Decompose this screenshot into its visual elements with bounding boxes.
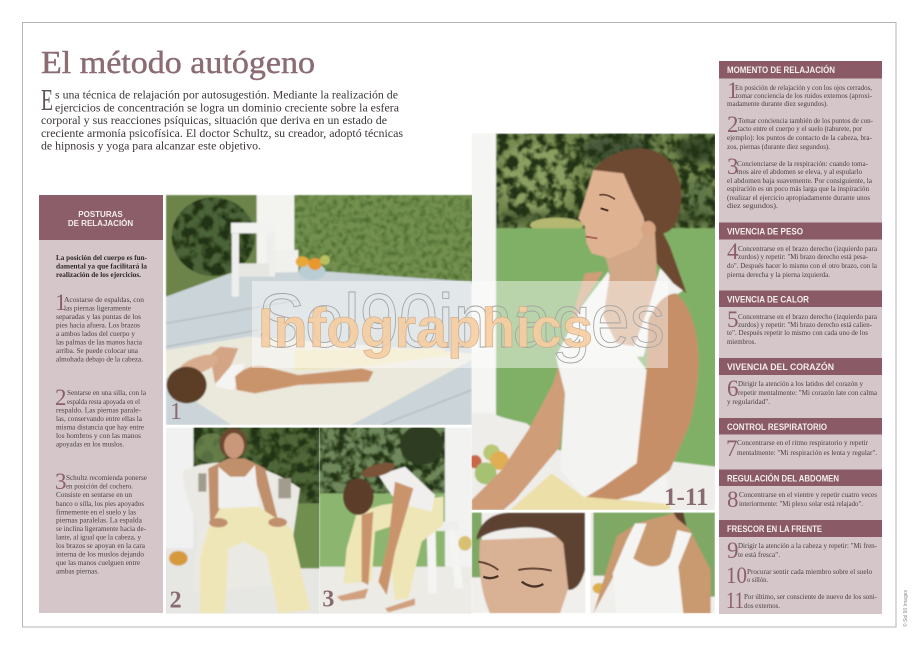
number 3: 3 (322, 587, 334, 613)
panel: autogenous exercises (719, 61, 882, 614)
watermark: Sol90images (258, 279, 665, 364)
section: control respiratorio: Concentrarse en el ritmo respiratorio y repetir (737, 438, 869, 447)
section: control respiratorio: mentalmente: "Mi respiración es lenta y regular". (737, 448, 877, 457)
section: frescor en la frente: Procurar sentir cada miembro sobre el suelo (747, 567, 872, 576)
posture 1 text: Acostarse de espaldas, con (64, 295, 144, 304)
section: vivencia de peso (719, 222, 882, 279)
photo 1: lying posture (166, 195, 473, 425)
section: frescor en la frente: te está fresca". (738, 550, 780, 559)
panel heading (68, 210, 133, 228)
posture 1 text: almohada debajo de la cabeza. (56, 354, 143, 364)
section: vivencia de calor: miembros. (727, 337, 756, 346)
number 1: 1 (170, 399, 182, 425)
photo 2: seated in chair (165, 427, 322, 615)
posture 3 text: lante, al igual que la cabeza, y (56, 532, 141, 542)
section: momento de relajación (719, 61, 882, 210)
section: momento de relajación: diez segundos). (727, 201, 778, 210)
section: vivencia del corazón: 6 (727, 376, 738, 401)
posture 1 text: 1 (55, 290, 66, 315)
section: momento de relajación: tomar conciencia de los ruidos externos (aproxi- (736, 91, 873, 100)
posture 1 text: pies hacia afuera. Los brazos (56, 320, 140, 330)
section: vivencia de peso: 4 (727, 239, 739, 264)
section: frescor en la frente: 9 (727, 538, 738, 563)
section: vivencia de peso: zurdos) y repetir: "Mi brazo derecho está pesa- (738, 252, 868, 261)
panel intro: La posición del cuerpo es fun- (56, 253, 148, 262)
panel heading: POSTURAS (78, 210, 123, 219)
intro text block: s una técnica de relajación por autosugestión. Mediante la realización de (55, 88, 398, 102)
posture 3 text: ambas piernas. (56, 566, 99, 576)
posture 3 text: que las manos cuelguen entre (56, 558, 141, 567)
section: vivencia de peso: pierna derecha y la pierna izquierda. (727, 270, 830, 279)
section: momento de relajación: tacto entre el cuerpo y el suelo (taburete, por (738, 124, 862, 133)
posture 3 text: banco o silla, los pies apoyados (56, 499, 144, 508)
panel intro: damental ya que facilitará la (56, 262, 147, 270)
section: vivencia del corazón: repetir mentalmente: "Mi corazón late con calma (738, 388, 878, 397)
section: vivencia del corazón: VIVENCIA DEL CORAZÓN (727, 361, 834, 372)
posture 3 text: en posición del cochero. (66, 482, 133, 490)
section: regulación del abdomen: REGULACIÓN DEL ABDOMEN (727, 472, 839, 484)
section: frescor en la frente: Dirigir la atención a la cabeza y repetir: "Mi fren- (738, 541, 878, 550)
posture 3 text: 3 (55, 469, 66, 494)
intro text block: ejercicios de concentración se logra un dominio creciente sobre la esfera (55, 102, 399, 114)
section: regulación del abdomen: interiormente: "Mi plexo solar está relajado". (739, 499, 863, 508)
posture 1 text: a ambos lados del cuerpo y (56, 329, 135, 338)
section: vivencia del corazón: y regularidad". (727, 397, 770, 406)
photo: torso detail (590, 512, 715, 613)
panel heading: DE RELAJACIÓN (68, 219, 133, 228)
section: vivencia de calor: Concentrarse en el brazo derecho (izquierdo para (738, 312, 878, 321)
section: momento de relajación: el abdomen baja suavemente. Por consiguiente, la (727, 176, 873, 185)
section: momento de relajación: ejemplo): los puntos de contacto de la cabeza, bra- (727, 133, 873, 142)
section: momento de relajación: En posición de relajación y con los ojos cerrados, (735, 83, 872, 92)
section: momento de relajación: Concienciarse de la respiración: cuando toma- (737, 159, 869, 168)
photo 3: coachman posture (319, 425, 473, 615)
credit: © Sol 90 Images (902, 590, 909, 627)
section: regulación del abdomen (719, 470, 882, 512)
intro text block: E (41, 82, 53, 117)
posture 3 text (55, 469, 148, 576)
posture 2 text: espalda resta apoyada en el (67, 397, 140, 406)
section: vivencia de calor (719, 290, 882, 346)
panel intro (56, 253, 148, 279)
section: momento de relajación: madamente durante diez segundos). (727, 99, 828, 108)
intro text block (41, 82, 404, 152)
section: vivencia del corazón: Dirigir la atención a los latidos del corazón y (738, 379, 863, 388)
section: momento de relajación: 3 (727, 154, 738, 179)
section: momento de relajación: zos, piernas (durante diez segundos). (727, 142, 830, 151)
posture 1 text: arriba. Se puede colocar una (56, 346, 139, 355)
posture 2 text: respaldo. Las piernas parale- (56, 406, 142, 414)
posture 2 text: las, conservando entre ellas la (56, 414, 143, 423)
section: frescor en la frente: FRESCOR EN LA FRENTE (727, 524, 822, 534)
section: momento de relajación: 1 (727, 78, 738, 103)
section: frescor en la frente (719, 520, 882, 613)
posture 3 text: los brazos se apoyan en la cara (56, 541, 146, 550)
section: vivencia de peso: VIVENCIA DE PESO (727, 226, 803, 236)
section: control respiratorio (719, 418, 882, 461)
title: El método autógeno (41, 44, 315, 80)
section: vivencia de calor: te". Después repetir lo mismo con cada uno de los (727, 328, 868, 337)
posture 2 text: Sentarse en una silla, con la (67, 388, 147, 397)
posture 3 text: firmemente en el suelo y las (56, 508, 136, 516)
section: frescor en la frente: Por último, ser consciente de nuevo de los soni- (744, 592, 878, 601)
number 1-11: 1-11 (664, 484, 708, 511)
panel intro: realización de los ejercicios. (56, 270, 141, 279)
section: frescor en la frente: 11 (726, 588, 744, 613)
posture 1 text: las palmas de las manos hacia (56, 338, 143, 346)
section: momento de relajación: 2 (727, 112, 738, 137)
posture 1 text: separadas y las puntas de los (56, 312, 141, 321)
number 2: 2 (170, 588, 182, 614)
photo: closed eyes detail (472, 512, 586, 613)
posture 2 text: apoyadas en los muslos. (56, 440, 124, 448)
section: momento de relajación: espiración es un poco más larga que la inspiración (727, 184, 869, 193)
section: vivencia de calor: 5 (727, 307, 738, 332)
intro text block: creciente armonía psicofísica. El doctor Schultz, su creador, adoptó técnicas (41, 127, 404, 140)
section: frescor en la frente: dos externos. (744, 601, 780, 610)
section: vivencia del corazón (719, 358, 882, 406)
section: vivencia de peso: do". Después hacer lo mismo con el otro brazo, con la (727, 261, 878, 270)
section: control respiratorio: 7 (726, 436, 738, 461)
posture 1 text (55, 290, 144, 364)
section: vivencia de calor: zurdos) y repetir: "Mi brazo derecho está calien- (738, 320, 873, 329)
section: momento de relajación: mos aire el abdomen se eleva, y al espularlo (737, 167, 862, 176)
photo: large seated portrait (468, 130, 717, 512)
posture 3 text: Consiste en sentarse en un (56, 490, 132, 499)
section: regulación del abdomen: Concentrarse en el vientre y repetir cuatro veces (739, 490, 877, 499)
section: momento de relajación: MOMENTO DE RELAJACIÓN (727, 64, 835, 75)
section: regulación del abdomen: 8 (727, 487, 738, 512)
posture 1 text: las piernas ligeramente (64, 304, 132, 312)
posture 3 text: se inclina ligeramente hacia de- (56, 524, 147, 533)
section: vivencia de peso: Concentrarse en el brazo derecho (izquierdo para (738, 244, 878, 253)
posture 3 text: Schultz recomienda ponerse (66, 473, 148, 482)
posture 2 text: los hombros y con las manos (56, 431, 141, 440)
section: vivencia de calor: VIVENCIA DE CALOR (727, 294, 809, 304)
section: momento de relajación: Tomar conciencia también de los puntos de con- (738, 116, 874, 125)
section: momento de relajación: (realizar el ejercicio apropiadamente durante unos (727, 193, 870, 202)
section: frescor en la frente: o sillón. (747, 575, 768, 584)
watermark: Infographics (258, 296, 593, 359)
section: frescor en la frente: 10 (726, 563, 747, 588)
posture 2 text: misma distancia que hay entre (56, 422, 145, 432)
posture 3 text: piernas paralelas. La espalda (56, 516, 143, 524)
intro text block: de hipnosis y yoga para alcanzar este objetivo. (41, 140, 261, 152)
posture 3 text: interna de los muslos dejando (56, 550, 144, 558)
posture 2 text: 2 (55, 385, 66, 410)
posture 2 text (55, 385, 147, 448)
intro text block: corporal y sus reacciones psíquicas, situación que deriva en un estado de (41, 114, 387, 127)
section: control respiratorio: CONTROL RESPIRATORIO (727, 422, 827, 432)
panel: posturas de relajación (39, 195, 163, 613)
